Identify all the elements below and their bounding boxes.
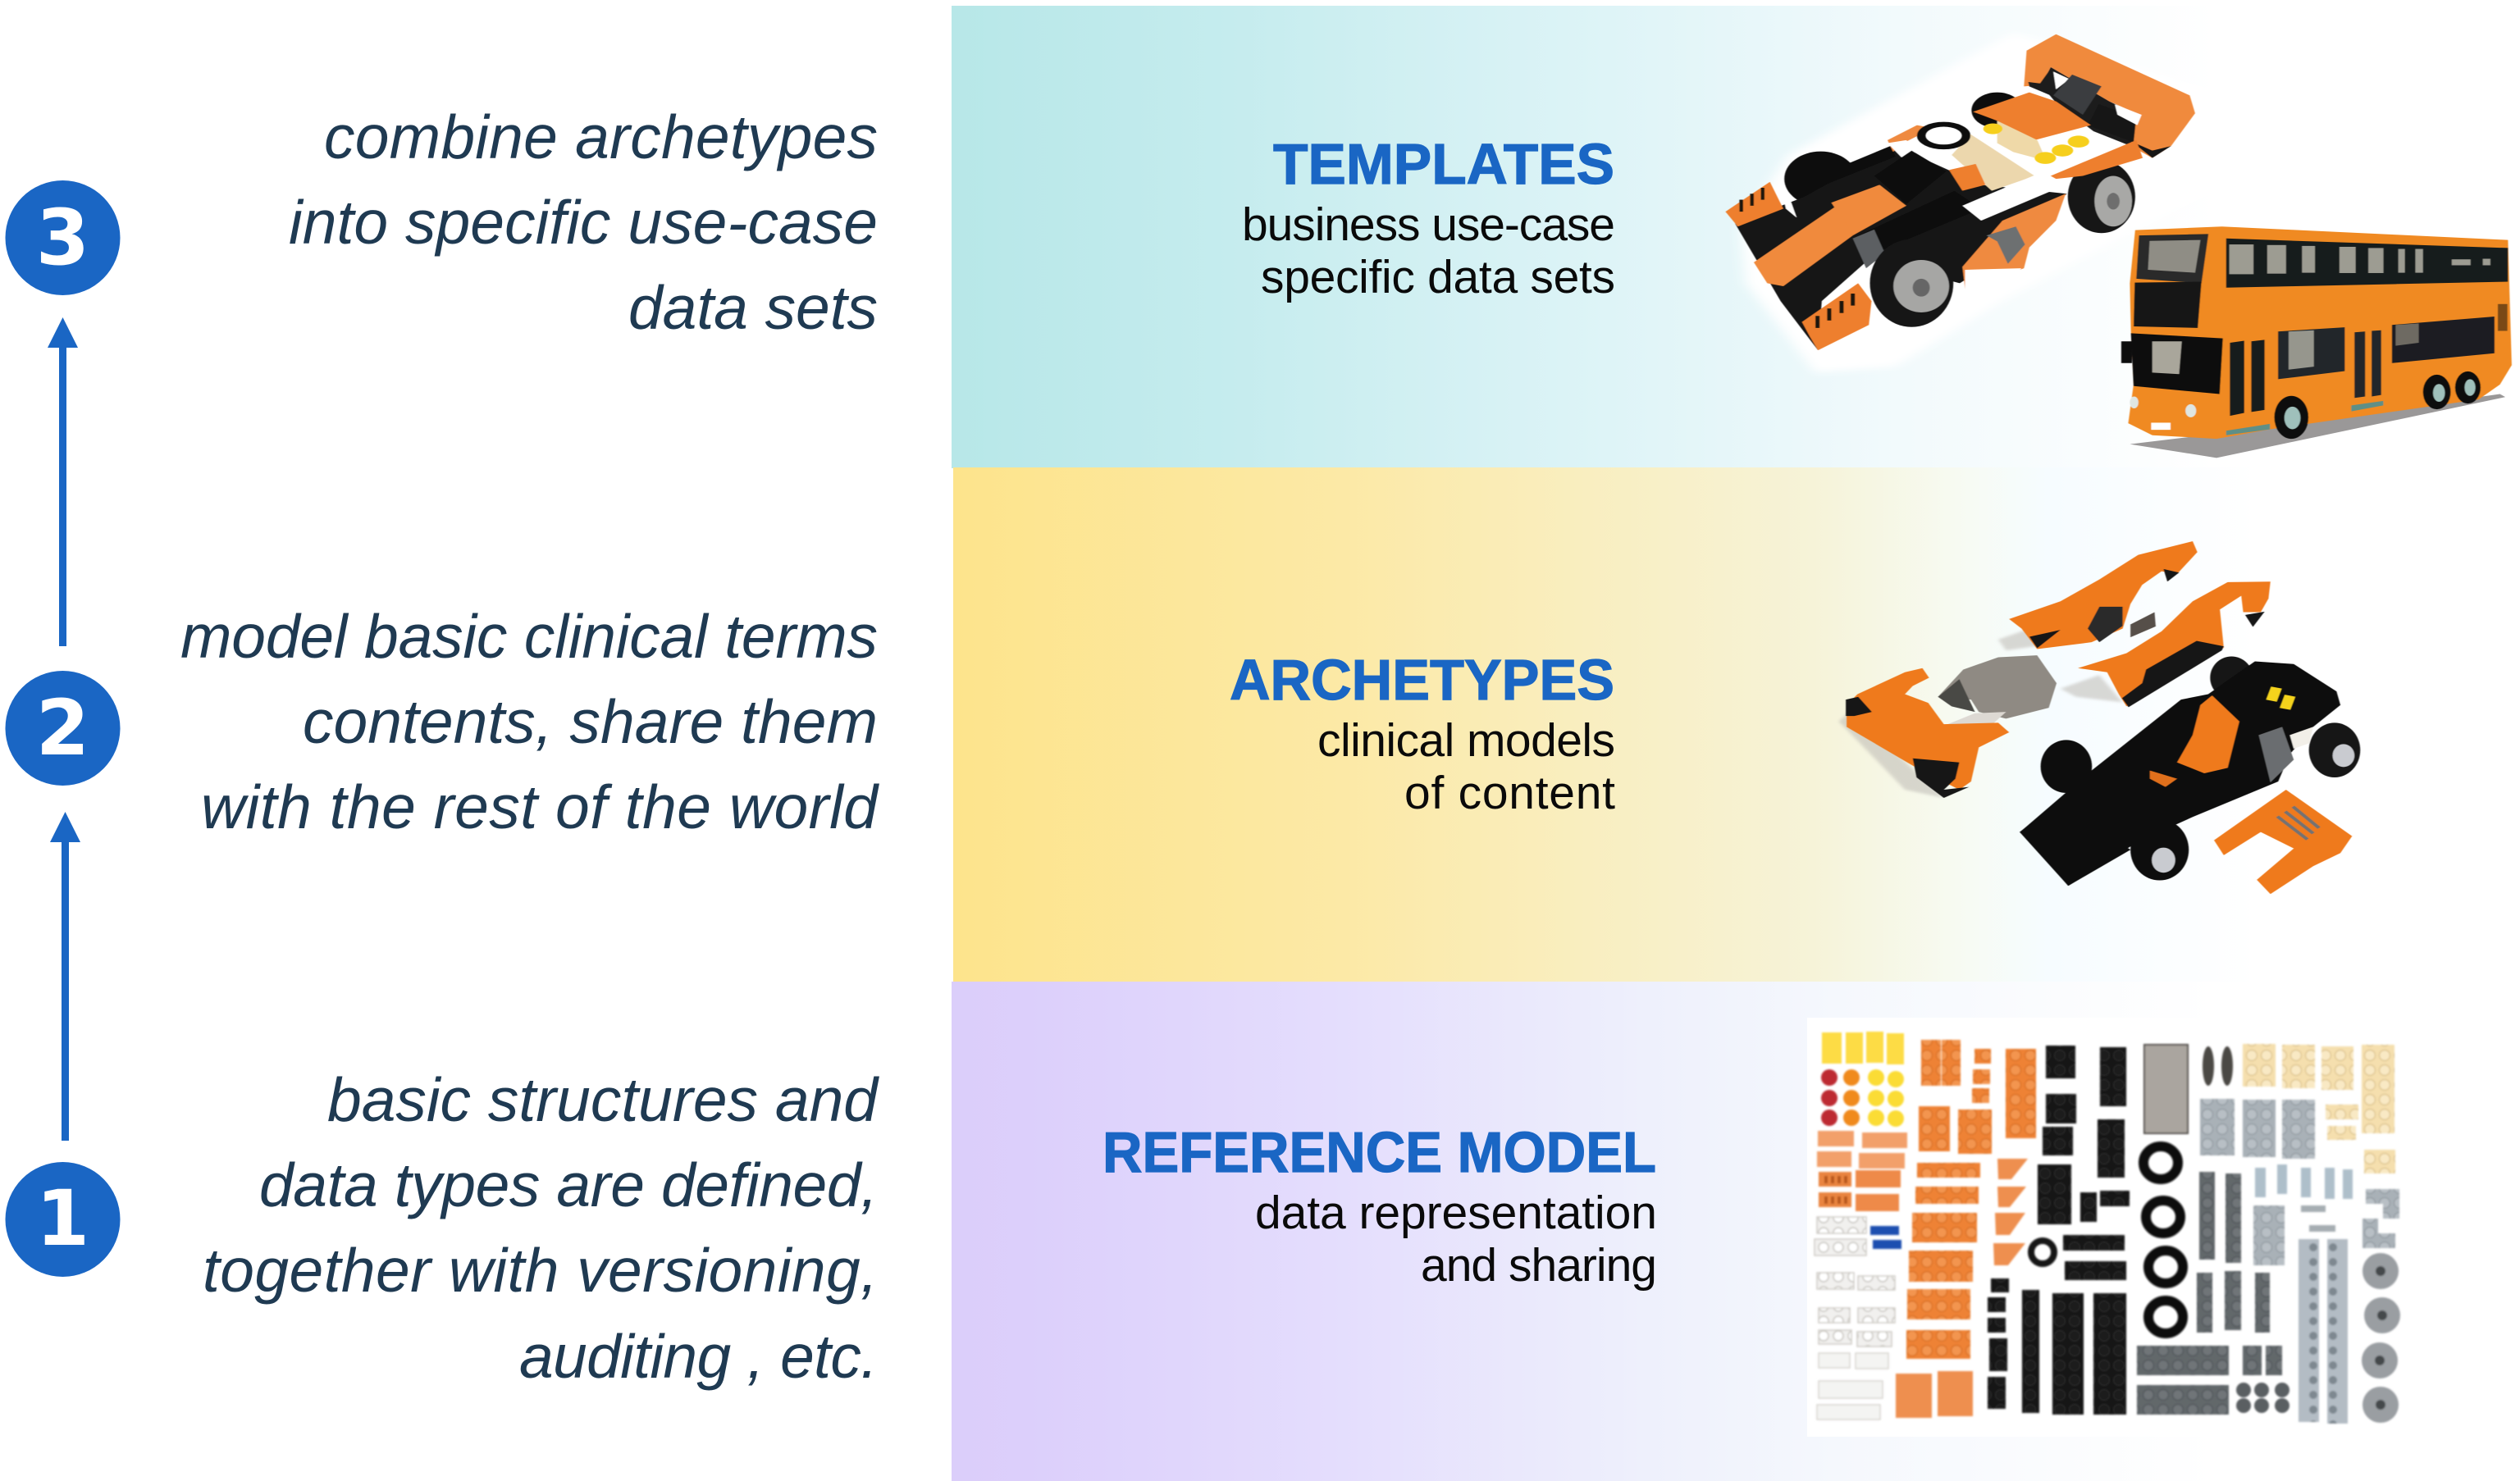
step 3 badge: 3	[36, 194, 89, 283]
heading: archetypes: of content	[1404, 767, 1615, 819]
heading: archetypes: ARCHETYPES	[1230, 648, 1614, 712]
heading: templates	[1242, 132, 1615, 303]
black bricks	[1988, 1046, 2130, 1415]
orange slope bricks	[1896, 1159, 2028, 1418]
heading: templates: business use-case	[1242, 198, 1615, 251]
description: step 2	[180, 602, 879, 841]
white bricks and blue pins	[1815, 1217, 1901, 1419]
heading: reference model: data representation	[1255, 1187, 1657, 1239]
round dark studs	[2236, 1383, 2289, 1413]
orange bricks	[1906, 1040, 2036, 1359]
panel: templates	[952, 6, 2520, 468]
description: step 3	[289, 103, 878, 342]
orange slopes and grilles	[1817, 1131, 1907, 1211]
yellow tiles and round studs	[1821, 1032, 1904, 1127]
tan bricks	[2243, 1044, 2395, 1173]
heading: reference model: REFERENCE MODEL	[1102, 1120, 1656, 1184]
heading: reference model	[1102, 1120, 1657, 1292]
heading: reference model: and sharing	[1421, 1239, 1657, 1292]
grey hubs	[2362, 1253, 2400, 1423]
description: step 2: model basic clinical terms	[180, 602, 878, 671]
heading: templates: specific data sets	[1261, 251, 1615, 303]
description: step 1	[203, 1065, 879, 1391]
picture: assembled lego race car	[1725, 33, 2227, 372]
description: step 3: combine archetypes	[324, 103, 878, 171]
heading: templates: TEMPLATES	[1273, 132, 1614, 196]
description: step 3: into specific use-case	[289, 188, 878, 257]
grey bricks	[2200, 1099, 2399, 1265]
description: step 1: auditing , etc.	[519, 1322, 878, 1391]
picture: lego parts laid out flat	[1807, 1018, 2416, 1437]
steering wheel	[2031, 1241, 2054, 1264]
description: step 1: data types are defined,	[259, 1151, 878, 1219]
heading: archetypes: clinical models	[1317, 714, 1615, 767]
smoked panel and tires	[2143, 1045, 2233, 1333]
picture: lego car split into modules	[1839, 541, 2360, 894]
picture: assembled lego double-decker bus	[2121, 226, 2512, 458]
step 1 badge: 1	[36, 1174, 89, 1264]
arrow from step 2 to step 3	[48, 317, 78, 646]
description: step 1: basic structures and	[327, 1065, 879, 1134]
panel: reference model	[952, 982, 2520, 1481]
step 2 badge: 2	[36, 684, 89, 773]
heading: archetypes	[1230, 648, 1615, 819]
step 1 badge	[5, 1162, 120, 1277]
step 3 badge	[5, 180, 120, 295]
description: step 3: data sets	[628, 273, 878, 342]
description: step 2: contents, share them	[303, 687, 878, 756]
description: step 2: with the rest of the world	[201, 772, 879, 841]
technic pins and beams	[2255, 1164, 2353, 1424]
arrow from step 1 to step 2	[50, 812, 80, 1141]
dark grey bricks	[2137, 1172, 2282, 1415]
description: step 1: together with versioning,	[203, 1236, 878, 1305]
step 2 badge	[5, 671, 120, 786]
panel: archetypes	[953, 467, 2520, 982]
